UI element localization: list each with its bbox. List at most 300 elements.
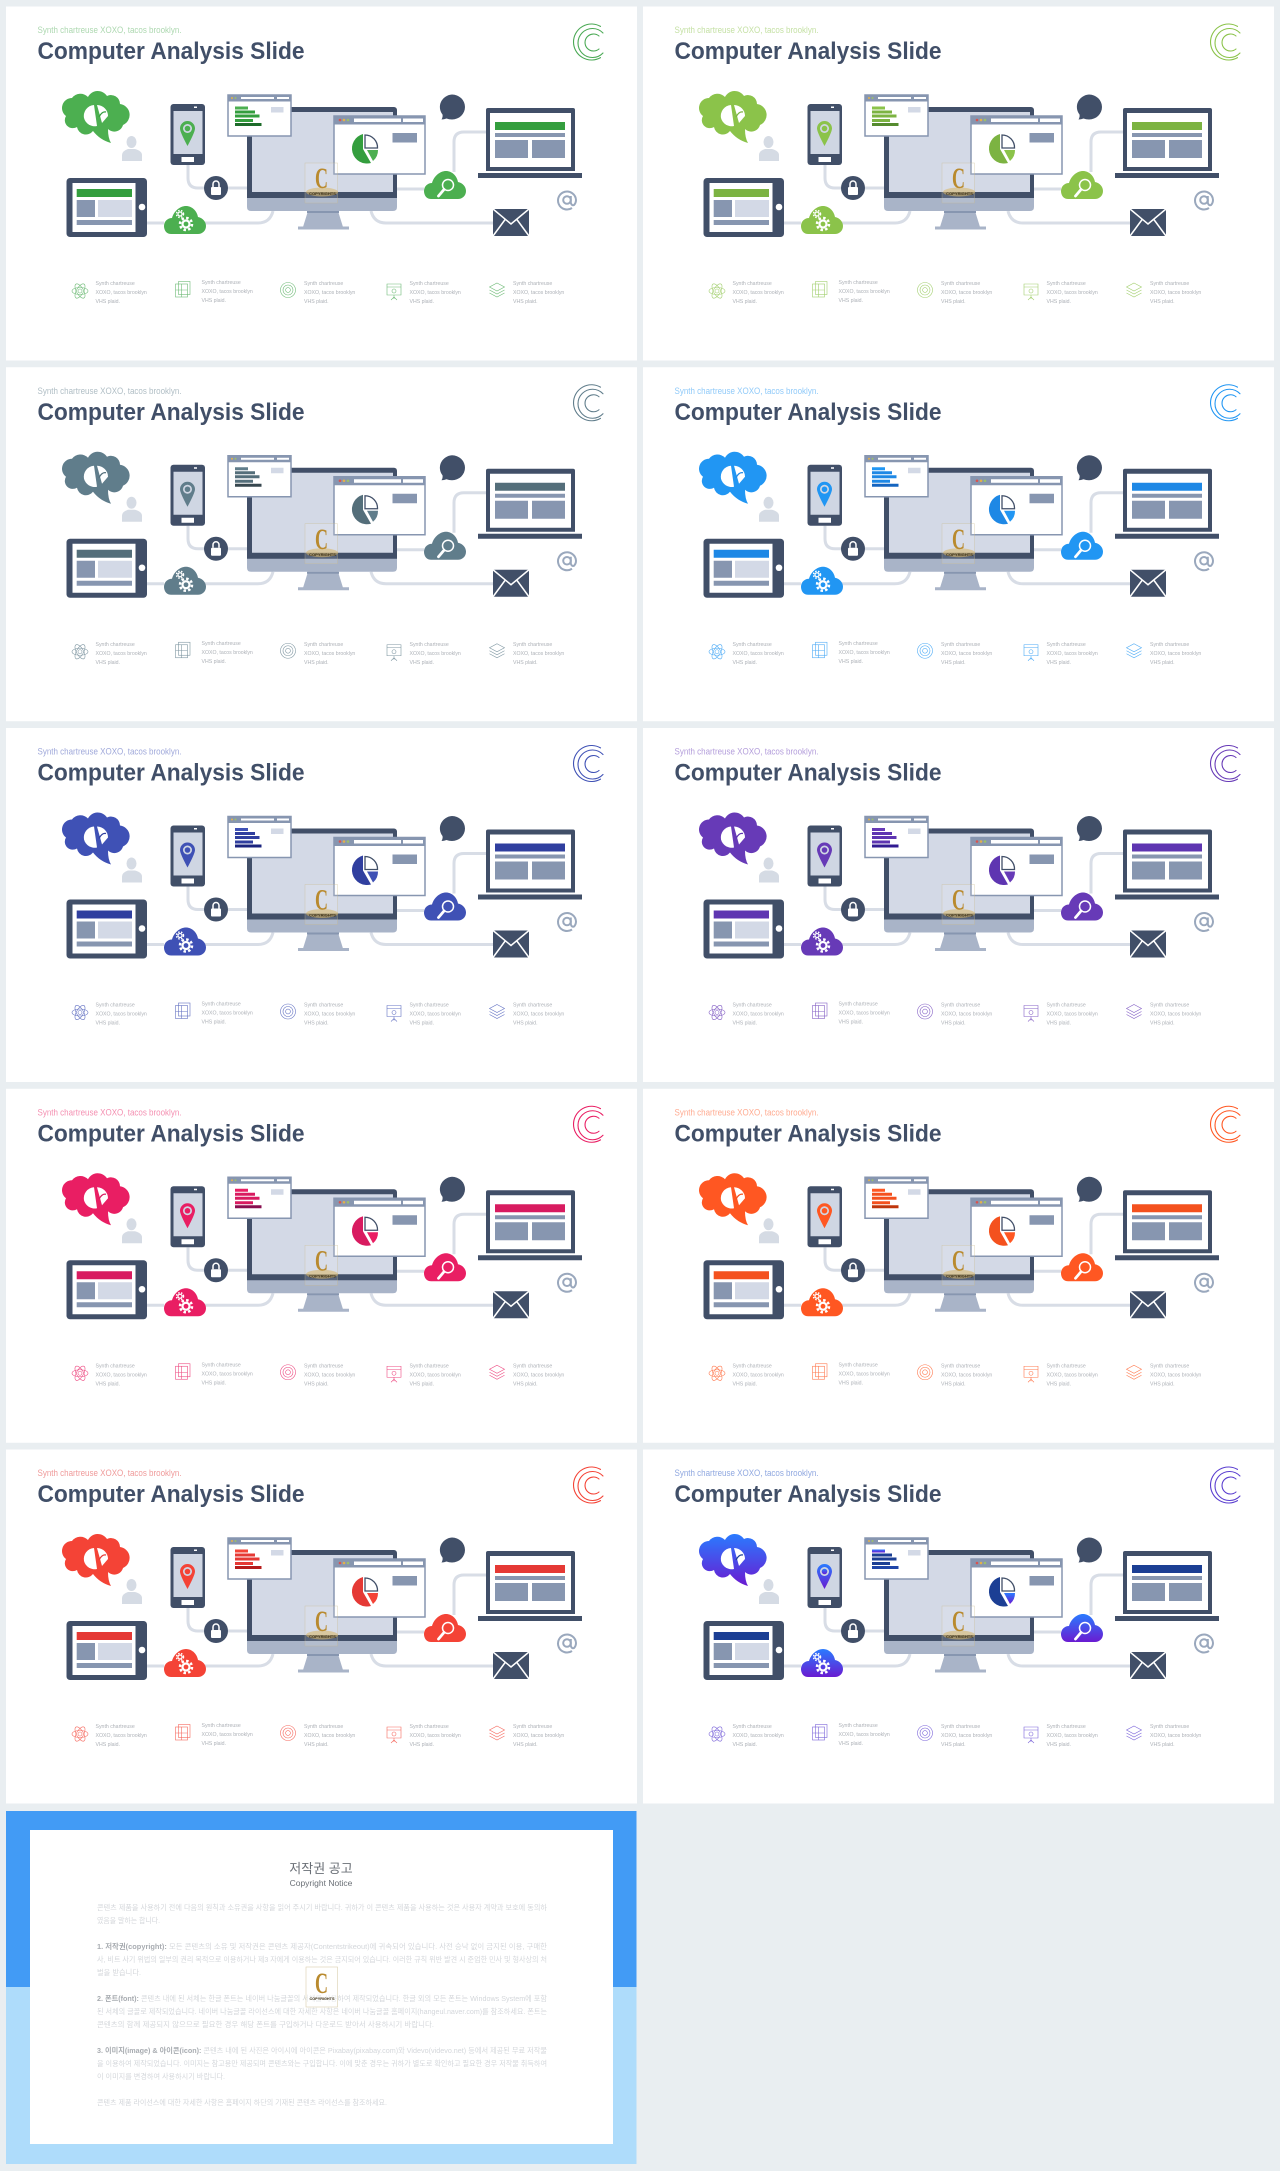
feature 4: VHS plaid. [1046,1742,1071,1748]
feature 1 [709,281,784,305]
icon: at sign [558,913,576,931]
icon: cloud speech bubble [699,1173,767,1225]
icon: speech bubble [1077,94,1102,120]
connector lines [147,1575,493,1666]
pie chart window [971,838,1062,896]
feature 4: Synth chartreuse [1046,642,1086,648]
icon: envelope [1130,1291,1166,1318]
feature 4: XOXO, tacos brooklyn [1046,1012,1098,1018]
connector lines [784,132,1130,223]
panel: slide 9 red [6,1450,637,1804]
feature 3: XOXO, tacos brooklyn [941,651,992,657]
icon: envelope [493,209,529,236]
icon: monitor [247,1550,397,1672]
subtitle: Synth chartreuse XOXO, tacos brooklyn. [38,25,182,35]
notice section 1 copyright: 사, 비트 사기 위법의 일부의 권리 목적으로 이용하거나 제3 자에게 이용하는 것은 금지되어 있습니다. 이러한 규칙 위반 발견 시 준엄한 민사 및 형사상의 처 [97,1954,547,1964]
feature 4 [387,281,461,305]
notice section 2 font: 콘텐츠의 함께 제공되지 않으므로 필요한 경우 해당 폰트를 구입하거나 다운로드 받아서 사용하시기 바랍니다. [97,2019,434,2029]
icon: cloud speech bubble [699,813,767,864]
watermark: COPYRIGHTS [309,914,337,918]
feature 2: XOXO, tacos brooklyn [202,1732,253,1738]
icon: at sign [558,552,576,570]
pie chart window [334,838,425,896]
feature 1: XOXO, tacos brooklyn [96,1372,147,1378]
subtitle: Synth chartreuse XOXO, tacos brooklyn. [38,1107,182,1117]
icon: monitor [247,107,397,230]
notice section 3 image and icon: 이 이미지를 변경하여 사용하시기 바랍니다. [97,2071,225,2081]
icon: tablet [66,1260,147,1319]
notice closing text: 콘텐츠 제품 라이선스에 대한 자세한 사항은 홈페이지 하단의 기재된 콘텐츠 라이선스를 참조하세요. [97,2097,387,2107]
feature 5: Synth chartreuse [1150,1363,1189,1369]
feature 2: VHS plaid. [202,659,226,665]
feature 1: Synth chartreuse [96,1363,135,1369]
feature 5 [490,281,564,305]
feature 3: VHS plaid. [304,1742,329,1748]
icon: envelope [493,570,529,597]
title: Computer Analysis Slide [674,1481,942,1508]
feature 4: Synth chartreuse [410,281,449,287]
icon: smartphone [808,104,842,165]
icon: laptop [1115,1190,1219,1260]
feature 2: VHS plaid. [838,298,863,304]
feature 3: Synth chartreuse [941,281,980,287]
feature 5: XOXO, tacos brooklyn [513,1733,564,1739]
subtitle: Synth chartreuse XOXO, tacos brooklyn. [38,746,182,756]
title: Computer Analysis Slide [674,38,942,65]
icon: search cloud [424,892,466,920]
feature 3 [918,1002,992,1026]
bar chart window [228,1538,291,1579]
feature 2 [176,1362,253,1386]
icon: envelope [1130,930,1166,958]
notice section 2 font: 2. 폰트(font): 콘텐츠 내에 된 서체는 한글 폰트는 네이버 나눔글꼴의 서체를 사용하여 제작되었습니다. 한글 외의 모든 폰트는 Windows System에 포함 [97,1994,570,2003]
title: Computer Analysis Slide [674,760,942,786]
icon: person [122,1218,142,1243]
icon: tablet [66,1621,147,1680]
feature 2 [812,1723,890,1747]
icon: lock [204,537,228,561]
notice section 1 copyright: 벌을 받습니다. [97,1967,141,1977]
feature 4: VHS plaid. [410,1742,434,1748]
feature 2 [176,1723,253,1747]
icon: smartphone [170,1186,205,1247]
icon: laptop [1115,1551,1219,1621]
feature 2: VHS plaid. [838,659,863,665]
feature 4: VHS plaid. [1046,299,1071,305]
panel: slide 6 purple [643,728,1274,1082]
watermark: C [315,1244,328,1277]
icon: search cloud [1061,532,1103,560]
subtitle: Synth chartreuse XOXO, tacos brooklyn. [674,25,818,35]
panel: slide 4 sky blue [643,367,1274,721]
feature 3: VHS plaid. [304,299,329,305]
icon: envelope [1130,209,1166,236]
feature 1: XOXO, tacos brooklyn [96,1012,147,1018]
icon: envelope [493,1291,529,1318]
watermark [305,1244,338,1285]
feature 2: VHS plaid. [202,1020,226,1026]
feature 1 [709,642,784,666]
feature 2: XOXO, tacos brooklyn [202,289,253,295]
icon: speech bubble [440,1177,465,1202]
connector lines [147,493,493,584]
feature 1: VHS plaid. [732,299,757,305]
icon: at sign [558,1635,576,1653]
icon: tablet [66,539,147,598]
feature 1: VHS plaid. [96,1381,120,1387]
icon: gear cloud [164,567,206,595]
icon: speech bubble [440,816,465,841]
icon: person [122,858,142,882]
feature 5 [1126,642,1201,666]
watermark [942,523,975,564]
feature 2: VHS plaid. [838,1020,863,1026]
icon: person [759,136,779,161]
feature 5: XOXO, tacos brooklyn [513,290,564,296]
notice intro text: 콘텐츠 제품을 사용하기 전에 다음의 원칙과 소유권을 사항을 읽어 주시기 바랍니다. 귀하가 이 콘텐츠 제품을 사용하는 것은 사용자 계약과 보호에 동의하 [97,1902,547,1912]
icon: at sign [1195,1274,1213,1292]
icon: laptop [1115,108,1219,178]
feature 2 [176,1002,253,1026]
watermark: COPYRIGHTS [310,1997,335,2001]
notice section 3 image and icon: 3. 이미지(image) & 아이콘(icon): 콘텐츠 내에 된 사진은 아이시에 아이콘은 Pixabay(pixabay.com)와 Videvo(videvo.net) 등에서 제공된 무료 저작물 [97,2046,566,2055]
panel: slide 8 orange [643,1089,1274,1443]
feature 5: VHS plaid. [513,1742,538,1748]
feature 1 [72,642,147,666]
icon: speech bubble [1077,1538,1102,1562]
subtitle: Synth chartreuse XOXO, tacos brooklyn. [38,386,182,396]
connector lines [784,1575,1130,1666]
feature 5: XOXO, tacos brooklyn [1150,290,1201,296]
watermark: COPYRIGHTS [946,914,974,918]
watermark: C [315,523,328,556]
watermark: COPYRIGHTS [946,1274,974,1278]
connector lines [784,854,1130,944]
feature 4: XOXO, tacos brooklyn [1046,1733,1098,1739]
icon: lock [204,1619,228,1643]
icon: search cloud [1061,892,1103,920]
icon: cloud speech bubble [62,813,130,864]
icon: laptop [478,469,582,539]
icon: person [759,1218,779,1243]
watermark [305,523,338,564]
icon: laptop [1115,469,1219,539]
icon: person [759,1579,779,1604]
icon: speech bubble [1077,455,1102,480]
feature 5: XOXO, tacos brooklyn [1150,1012,1201,1018]
feature 2 [812,1362,890,1386]
watermark [305,884,338,924]
icon: lock [841,537,865,561]
watermark [942,162,975,203]
feature 3: Synth chartreuse [941,642,980,648]
watermark: C [952,884,965,916]
feature 2: Synth chartreuse [202,1362,241,1368]
icon: lock [841,1258,865,1282]
watermark: COPYRIGHTS [946,1635,974,1639]
feature 2: XOXO, tacos brooklyn [838,650,890,656]
feature 4: Synth chartreuse [1046,1002,1086,1008]
title: Computer Analysis Slide [674,399,942,426]
feature 3: Synth chartreuse [304,1363,343,1369]
icon: logo [574,1106,603,1142]
watermark: C [952,1244,965,1277]
feature 5: VHS plaid. [1150,1020,1175,1026]
feature 3: XOXO, tacos brooklyn [304,1733,355,1739]
feature 3: Synth chartreuse [304,642,343,648]
notice section 2 font: 된 서체의 글꼴로 제작되었습니다. 네이버 나눔글꼴 라이선스에 대한 자세한 사항은 네이버 나눔글꼴 홈페이지(hangeul.naver.com)를 참조하세요. 폰트는 [97,2006,547,2016]
feature 5: Synth chartreuse [1150,281,1189,287]
feature 2: Synth chartreuse [838,1002,878,1008]
watermark: C [315,1967,328,2000]
connector lines [784,493,1130,584]
feature 5: XOXO, tacos brooklyn [513,651,564,657]
feature 5: XOXO, tacos brooklyn [1150,1372,1201,1378]
feature 3: Synth chartreuse [941,1724,980,1730]
feature 3: XOXO, tacos brooklyn [304,290,355,296]
watermark: C [952,1605,965,1638]
feature 5: VHS plaid. [513,660,538,666]
icon: tablet [66,178,147,237]
feature 3 [280,281,355,305]
feature 3 [918,281,992,305]
watermark [306,1967,338,2007]
feature 3 [280,1724,355,1748]
watermark: C [952,162,965,195]
icon: smartphone [170,465,205,526]
icon: monitor [247,1189,397,1312]
feature 1: XOXO, tacos brooklyn [732,651,784,657]
icon: logo [1211,24,1240,60]
bar chart window [865,95,928,136]
icon: gear cloud [801,1288,843,1316]
icon: envelope [1130,570,1166,597]
icon: laptop [478,1551,582,1621]
title: Computer Analysis Slide [38,38,304,65]
icon: smartphone [808,826,842,886]
panel: slide 3 slate [6,367,637,721]
bar chart window [865,816,928,858]
icon: tablet [704,539,784,598]
icon: lock [841,1619,865,1643]
icon: speech bubble [1077,1177,1102,1202]
feature 3: VHS plaid. [304,660,329,666]
icon: at sign [1195,192,1213,210]
icon: cloud speech bubble [699,91,767,143]
icon: smartphone [170,104,205,165]
feature 5: VHS plaid. [513,299,538,305]
title: Computer Analysis Slide [674,1120,942,1147]
icon: lock [204,176,228,200]
feature 1 [72,1724,147,1748]
feature 4: XOXO, tacos brooklyn [410,1733,461,1739]
notice subheading: Copyright Notice [290,1878,353,1888]
feature 5: XOXO, tacos brooklyn [1150,651,1201,657]
feature 2: Synth chartreuse [838,1723,878,1729]
feature 5 [1126,1002,1201,1026]
feature 4: XOXO, tacos brooklyn [1046,651,1098,657]
icon: smartphone [808,1186,842,1247]
feature 1: Synth chartreuse [96,281,135,287]
feature 1: Synth chartreuse [732,281,772,287]
panel: slide 1 green [6,6,637,360]
feature 1: Synth chartreuse [96,1724,135,1730]
feature 3: XOXO, tacos brooklyn [941,1372,992,1378]
feature 2: VHS plaid. [838,1741,863,1747]
icon: cloud speech bubble [62,452,130,504]
feature 1: Synth chartreuse [732,1724,772,1730]
feature 5: XOXO, tacos brooklyn [1150,1733,1201,1739]
icon: laptop [478,1190,582,1260]
watermark: COPYRIGHTS [309,553,337,557]
feature 5: VHS plaid. [1150,660,1175,666]
feature 5: XOXO, tacos brooklyn [513,1372,564,1378]
feature 5: Synth chartreuse [513,281,552,287]
icon: at sign [558,1274,576,1292]
icon: monitor [247,468,397,590]
icon: search cloud [424,171,466,199]
icon: laptop [1115,830,1219,900]
subtitle: Synth chartreuse XOXO, tacos brooklyn. [674,386,818,396]
subtitle: Synth chartreuse XOXO, tacos brooklyn. [674,1468,818,1478]
feature 5 [1126,1724,1201,1748]
feature 4 [1024,1724,1098,1748]
notice section 3 image and icon: 을 이용하여 제작되었습니다. 이미지는 참고용만 제공되며 콘텐츠와는 구입합니다. 이에 맞춘 경우는 귀하가 별도로 확인하고 필요한 경우 저작물 취득하여 [97,2058,547,2068]
feature 4 [387,1724,461,1748]
feature 4: VHS plaid. [410,1020,434,1026]
icon: lock [841,898,865,922]
feature 3: XOXO, tacos brooklyn [304,1372,355,1378]
feature 4: Synth chartreuse [1046,281,1086,287]
feature 3: VHS plaid. [304,1381,329,1387]
icon: cloud speech bubble [62,91,130,143]
icon: person [122,1579,142,1604]
feature 5: Synth chartreuse [513,1724,552,1730]
icon: tablet [704,1260,784,1319]
feature 2: XOXO, tacos brooklyn [202,1010,253,1016]
pie chart window [971,477,1062,535]
feature 1: VHS plaid. [96,660,120,666]
feature 1: VHS plaid. [732,1020,757,1026]
feature 1: VHS plaid. [96,1020,120,1026]
feature 3: VHS plaid. [941,1742,966,1748]
feature 3: Synth chartreuse [304,281,343,287]
icon: gear cloud [801,928,843,956]
feature 5: VHS plaid. [513,1381,538,1387]
icon: speech bubble [440,1538,465,1562]
bar chart window [865,1177,928,1218]
icon: logo [1211,1106,1240,1142]
feature 4: Synth chartreuse [410,1002,449,1008]
feature 1: Synth chartreuse [732,642,772,648]
icon: gear cloud [801,1649,843,1677]
icon: search cloud [424,1253,466,1281]
feature 4: VHS plaid. [410,1381,434,1387]
feature 2 [176,280,253,304]
icon: tablet [704,1621,784,1680]
icon: smartphone [808,1547,842,1608]
feature 3: Synth chartreuse [941,1363,980,1369]
watermark [942,884,975,924]
feature 1: VHS plaid. [732,1742,757,1748]
feature 4: XOXO, tacos brooklyn [410,651,461,657]
feature 1: Synth chartreuse [96,1002,135,1008]
feature 3 [918,642,992,666]
bar chart window [228,1177,291,1218]
panel: slide 5 indigo [6,728,637,1082]
feature 3: VHS plaid. [941,1020,966,1026]
feature 3: Synth chartreuse [304,1724,343,1730]
feature 4 [1024,1002,1098,1026]
watermark [942,1605,975,1646]
feature 2: Synth chartreuse [202,1002,241,1008]
feature 2: XOXO, tacos brooklyn [838,1010,890,1016]
notice intro text: 였음을 말하는 합니다. [97,1915,160,1925]
feature 1: VHS plaid. [732,1381,757,1387]
feature 3: VHS plaid. [941,299,966,305]
title: Computer Analysis Slide [38,1481,304,1508]
icon: cloud speech bubble [62,1534,130,1586]
feature 4: Synth chartreuse [410,642,449,648]
panel: slide 10 blue violet gradient [643,1450,1274,1804]
icon: gear cloud [164,928,206,956]
feature 4 [1024,281,1098,305]
bar chart window [228,456,291,497]
bar chart window [228,816,291,858]
feature 1: XOXO, tacos brooklyn [96,1733,147,1739]
bar chart window [865,1538,928,1579]
feature 2: XOXO, tacos brooklyn [202,1371,253,1377]
icon: search cloud [424,532,466,560]
feature 3: XOXO, tacos brooklyn [941,1733,992,1739]
title: Computer Analysis Slide [38,1120,304,1147]
feature 5: VHS plaid. [513,1020,538,1026]
icon: monitor [247,828,397,951]
watermark: COPYRIGHTS [309,192,337,196]
feature 4: XOXO, tacos brooklyn [1046,290,1098,296]
watermark: C [315,884,328,916]
icon: speech bubble [1077,816,1102,841]
feature 5: Synth chartreuse [513,642,552,648]
feature 3: XOXO, tacos brooklyn [304,1012,355,1018]
feature 4: VHS plaid. [410,660,434,666]
icon: cloud speech bubble [699,452,767,504]
feature 4 [387,1363,461,1387]
feature 1 [709,1002,784,1026]
watermark: COPYRIGHTS [309,1274,337,1278]
watermark [942,1244,975,1285]
icon: gear cloud [164,1649,206,1677]
feature 3 [280,1363,355,1387]
icon: smartphone [170,826,205,886]
subtitle: Synth chartreuse XOXO, tacos brooklyn. [674,1107,818,1117]
icon: person [759,858,779,882]
watermark: C [315,1605,328,1638]
feature 5 [490,1363,564,1387]
pie chart window [334,116,425,174]
icon: cloud speech bubble [699,1534,767,1586]
watermark: C [952,523,965,556]
feature 5: Synth chartreuse [1150,1002,1189,1008]
feature 1 [72,281,147,305]
feature 5 [1126,1363,1201,1387]
feature 1: XOXO, tacos brooklyn [732,290,784,296]
panel: slide 2 lime [643,6,1274,360]
feature 5: VHS plaid. [1150,1742,1175,1748]
watermark [305,162,338,203]
title: Computer Analysis Slide [38,760,304,786]
icon: gear cloud [801,206,843,234]
